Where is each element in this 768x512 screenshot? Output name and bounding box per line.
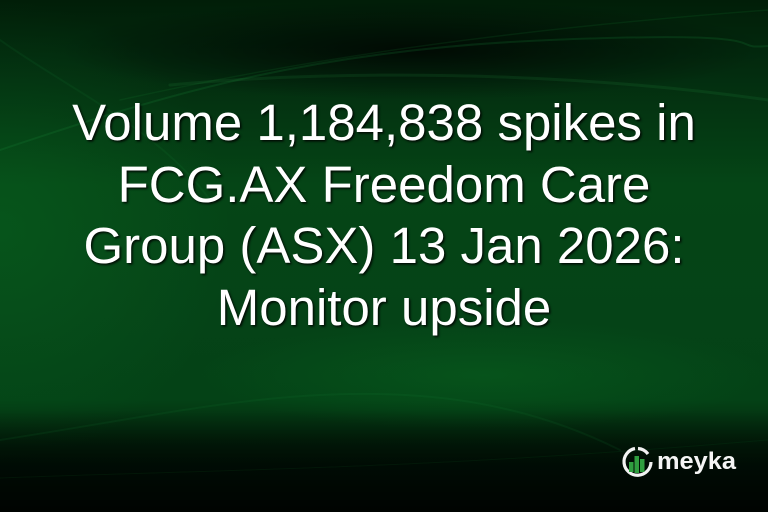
title: FCG.AX Freedom Care <box>118 156 650 212</box>
title: Volume 1,184,838 spikes in <box>72 94 696 151</box>
logo: meyka <box>622 446 737 477</box>
title <box>72 94 696 338</box>
wordmark: meyka <box>657 448 737 475</box>
title: Group (ASX) 13 Jan 2026: <box>83 217 685 274</box>
title: Monitor upside <box>217 278 551 336</box>
icon: ring with green bars <box>624 448 651 475</box>
